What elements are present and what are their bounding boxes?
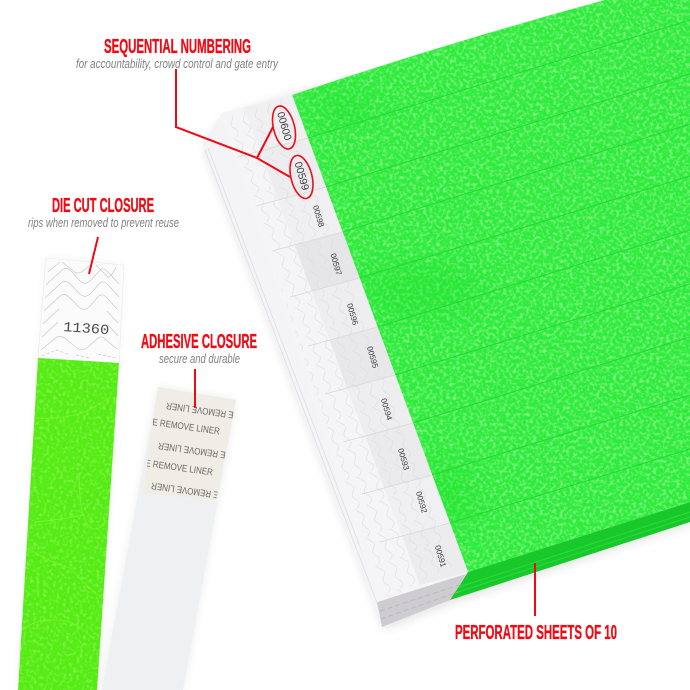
stub shaded bands [244,95,468,585]
remove liner text: E REMOVE LINER [157,440,226,460]
remove liner text: E REMOVE LINER [145,458,214,478]
leader line [194,369,196,408]
heading: SEQUENTIAL NUMBERING [104,35,251,58]
panel: wristband stack [202,0,690,630]
die cut waves [41,262,119,358]
panel: die cut closure wristband [18,258,124,690]
stack side edge [202,94,468,627]
liner backing [143,387,236,500]
heading: ADHESIVE CLOSURE [141,330,257,353]
green top face [292,0,690,572]
strip shadow [102,387,236,690]
callout: adhesive closure [141,330,257,408]
heading: DIE CUT CLOSURE [52,194,154,217]
stack shadow [204,0,690,630]
panel: adhesive closure wristband [102,387,236,690]
numbered stub strip [222,95,468,602]
leader lines [176,69,290,177]
stub wave pattern [224,97,455,600]
serial numbers: 00597 [329,252,343,277]
leader line [89,237,98,274]
subtext: rips when removed to prevent reuse [28,216,179,230]
serial numbers: 00594 [379,397,394,422]
remove liner text: E REMOVE LINER [152,417,221,437]
stub separators [238,138,450,542]
serial numbers: 00595 [365,345,380,370]
number ellipses [268,104,300,151]
strip shadow [18,258,123,690]
remove liner text: E REMOVE LINER [150,480,219,500]
stack underside [377,574,466,627]
white closure end [38,258,124,363]
callout: die cut closure [28,194,179,274]
serial numbers: 00591 [433,544,448,569]
callout: sequential numbering [76,35,317,201]
serial numbers [274,110,448,569]
serial numbers: 00593 [396,447,411,472]
serial numbers: 00600 [274,110,294,142]
serial numbers: 00592 [414,490,429,515]
serial numbers: 00596 [345,302,360,327]
green side layers [455,512,690,593]
green darker patches [310,92,480,535]
leader line [534,563,536,616]
white band [102,387,236,690]
printed number: 11360 [63,320,110,339]
remove liner text: E REMOVE LINER [165,400,234,420]
green band [18,358,119,690]
green side thickness [450,502,690,600]
subtext: for accountability, crowd control and gate entry [76,57,279,71]
band fibres [22,398,108,640]
serial numbers: 00598 [311,204,326,229]
stack end detail [380,584,462,619]
serial numbers: 00599 [292,160,311,192]
layered sheet edges [205,148,388,624]
perforation lines on green [308,20,690,523]
subtext: secure and durable [159,352,240,366]
remove liner text [145,400,234,500]
